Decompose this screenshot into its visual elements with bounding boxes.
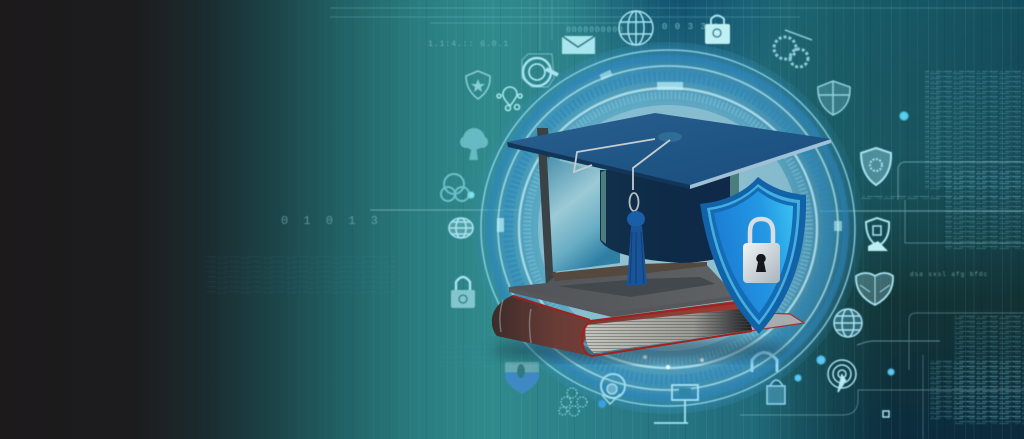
- digital rain lines: [500, 0, 1003, 439]
- keyhole: [756, 254, 766, 272]
- shield outer: [700, 177, 806, 334]
- icon: globe left: [449, 218, 473, 238]
- small square: [883, 411, 889, 417]
- laptop display: [547, 157, 620, 272]
- outer glow halo: [473, 42, 863, 414]
- icon: helmet left: [441, 174, 469, 201]
- binary text fragments: [281, 22, 988, 278]
- circuit panel lines right: [370, 162, 1024, 439]
- book: [492, 295, 804, 356]
- icon: shield upper right: [818, 81, 850, 115]
- icon: key pedestal: [654, 385, 698, 423]
- silver wire: [574, 139, 670, 190]
- tassel ring: [630, 193, 638, 211]
- icon: shield star: [466, 71, 490, 99]
- icon: tree: [460, 128, 488, 160]
- inner disc: [538, 105, 798, 351]
- top dark glow: [560, 0, 800, 110]
- icon: molecule: [559, 388, 587, 416]
- shield rim inner: [710, 187, 797, 321]
- icon: badge: [866, 218, 889, 251]
- padlock: [743, 219, 780, 283]
- icon: padlock left: [451, 277, 475, 308]
- ring highlights: [497, 70, 842, 369]
- binary text fragments: 1.1:4.:: 6.0.1: [428, 40, 509, 49]
- icon: padlock top: [705, 16, 730, 44]
- icon: globe lower right: [834, 309, 862, 337]
- soft shadow: [490, 338, 790, 362]
- right data blocks: [205, 70, 1024, 426]
- back cover tip: [740, 312, 804, 331]
- binary text fragments: 0 1 0 1 3: [281, 214, 382, 228]
- mortarboard top: [507, 113, 831, 185]
- mortarboard underside left: [507, 142, 690, 189]
- cover top and spine: [492, 295, 750, 356]
- spine bands: [500, 300, 531, 343]
- binary text fragments: 0 0 3 3 1: [662, 22, 720, 32]
- icon: shield gear: [861, 148, 891, 185]
- top horizontal grid lines: [330, 0, 1024, 50]
- icon: gears: [774, 30, 812, 67]
- page lines: [585, 308, 752, 353]
- tassel threads: [627, 226, 647, 285]
- shield rim: [707, 184, 800, 325]
- shackle: [750, 219, 773, 243]
- icon: heart shield: [856, 273, 893, 305]
- tassel strands: [630, 232, 644, 284]
- right darkening wash: [778, 175, 1024, 439]
- pages block: [585, 308, 752, 353]
- icon: ring badge: [601, 374, 625, 404]
- cap body: [600, 170, 738, 263]
- mortarboard underside right: [690, 139, 831, 189]
- concentric tech rings: [481, 50, 855, 406]
- icon: half shield: [505, 362, 539, 394]
- icon: location pin: [497, 87, 522, 110]
- cap right edge: [730, 170, 739, 200]
- graduation cap: [507, 113, 831, 285]
- red cover edge: [513, 296, 752, 356]
- laptop base: [509, 263, 736, 314]
- cap body edge: [601, 170, 606, 244]
- icon: circular key: [522, 54, 558, 87]
- keyboard: [558, 277, 715, 297]
- glowing nodes: [468, 112, 908, 408]
- laptop deck front: [509, 287, 735, 317]
- lock body: [743, 243, 780, 283]
- tassel: [627, 193, 647, 285]
- shield: [700, 177, 806, 334]
- cap button: [658, 132, 682, 142]
- icon: mail: [562, 36, 595, 54]
- icon ring: [441, 11, 893, 423]
- laptop: [509, 128, 736, 317]
- icon: radar: [828, 360, 856, 392]
- laptop screen bezel: [537, 128, 556, 287]
- keyboard hinge: [552, 262, 707, 281]
- icon: globe top: [619, 11, 653, 45]
- shield inner: [714, 191, 793, 313]
- binary text fragments: 0000000000: [566, 26, 624, 35]
- binary text fragments: dsa sxsl afg bfdc: [910, 271, 988, 278]
- illustration: book, laptop, cap and shield: [490, 113, 831, 362]
- tassel knot: [627, 211, 645, 227]
- icon: padlock arcs: [752, 352, 785, 404]
